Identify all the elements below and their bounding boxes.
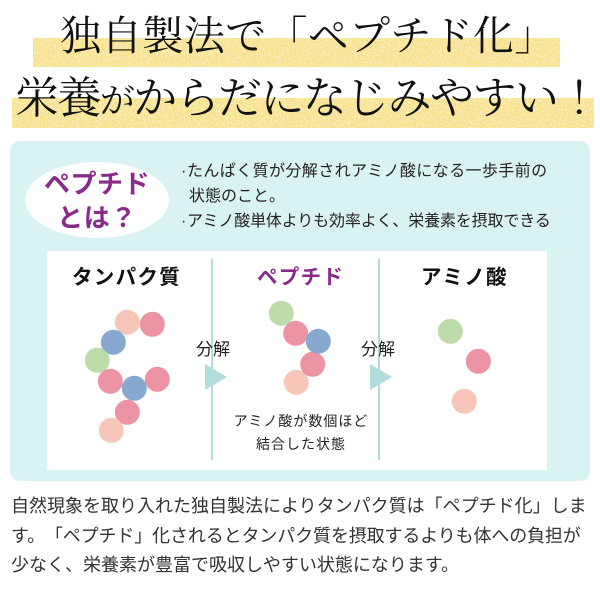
explanation text: アミノ酸単体よりも効率よく、栄養素を摂取できる bbox=[187, 213, 551, 230]
arrow 2 bbox=[370, 364, 392, 390]
explanation text: たんぱく質が分解されアミノ酸になる一歩手前の bbox=[187, 163, 547, 180]
peptide caption bbox=[234, 413, 368, 452]
arrow 1 bbox=[205, 364, 227, 390]
explanation text: · bbox=[181, 163, 186, 180]
body paragraph: 自然現象を取り入れた独自製法によりタンパク質は「ペプチド化」しま bbox=[11, 496, 587, 516]
white diagram panel bbox=[47, 251, 547, 470]
badge text bbox=[44, 169, 150, 233]
divider 1 bbox=[211, 259, 213, 460]
peptide caption: 結合した状態 bbox=[256, 436, 346, 452]
explanation text bbox=[181, 162, 551, 230]
amino acid circles bbox=[438, 319, 491, 414]
heading: peptide: ペプチド bbox=[257, 266, 344, 289]
badge: what is peptide bbox=[25, 162, 169, 238]
panel: peptide explanation bbox=[10, 141, 590, 481]
protein circles bbox=[85, 310, 170, 443]
peptide circles bbox=[269, 301, 331, 395]
badge text: ペプチド bbox=[44, 169, 150, 199]
body paragraph bbox=[11, 496, 587, 575]
explanation text: 状態のこと。 bbox=[189, 188, 285, 205]
divider 2 bbox=[378, 259, 380, 460]
title highlight bands bbox=[12, 38, 594, 128]
badge text: とは？ bbox=[57, 203, 137, 233]
label: decompose 2: 分解 bbox=[361, 340, 395, 359]
body paragraph: す。「ペプチド」化されるとタンパク質を摂取するよりも体への負担が bbox=[11, 526, 581, 546]
title line 1: 独自製法で「ペプチド化」 bbox=[60, 13, 556, 59]
title line 2: 栄養がからだになじみやすい！ bbox=[15, 74, 600, 123]
label: decompose 1: 分解 bbox=[196, 340, 230, 359]
explanation text: · bbox=[181, 213, 186, 230]
heading: protein: タンパク質 bbox=[72, 266, 181, 289]
body paragraph: 少なく、栄養素が豊富で吸収しやすい状態になります。 bbox=[11, 555, 459, 575]
peptide caption: アミノ酸が数個ほど bbox=[234, 413, 368, 429]
heading: amino acid: アミノ酸 bbox=[421, 266, 508, 289]
